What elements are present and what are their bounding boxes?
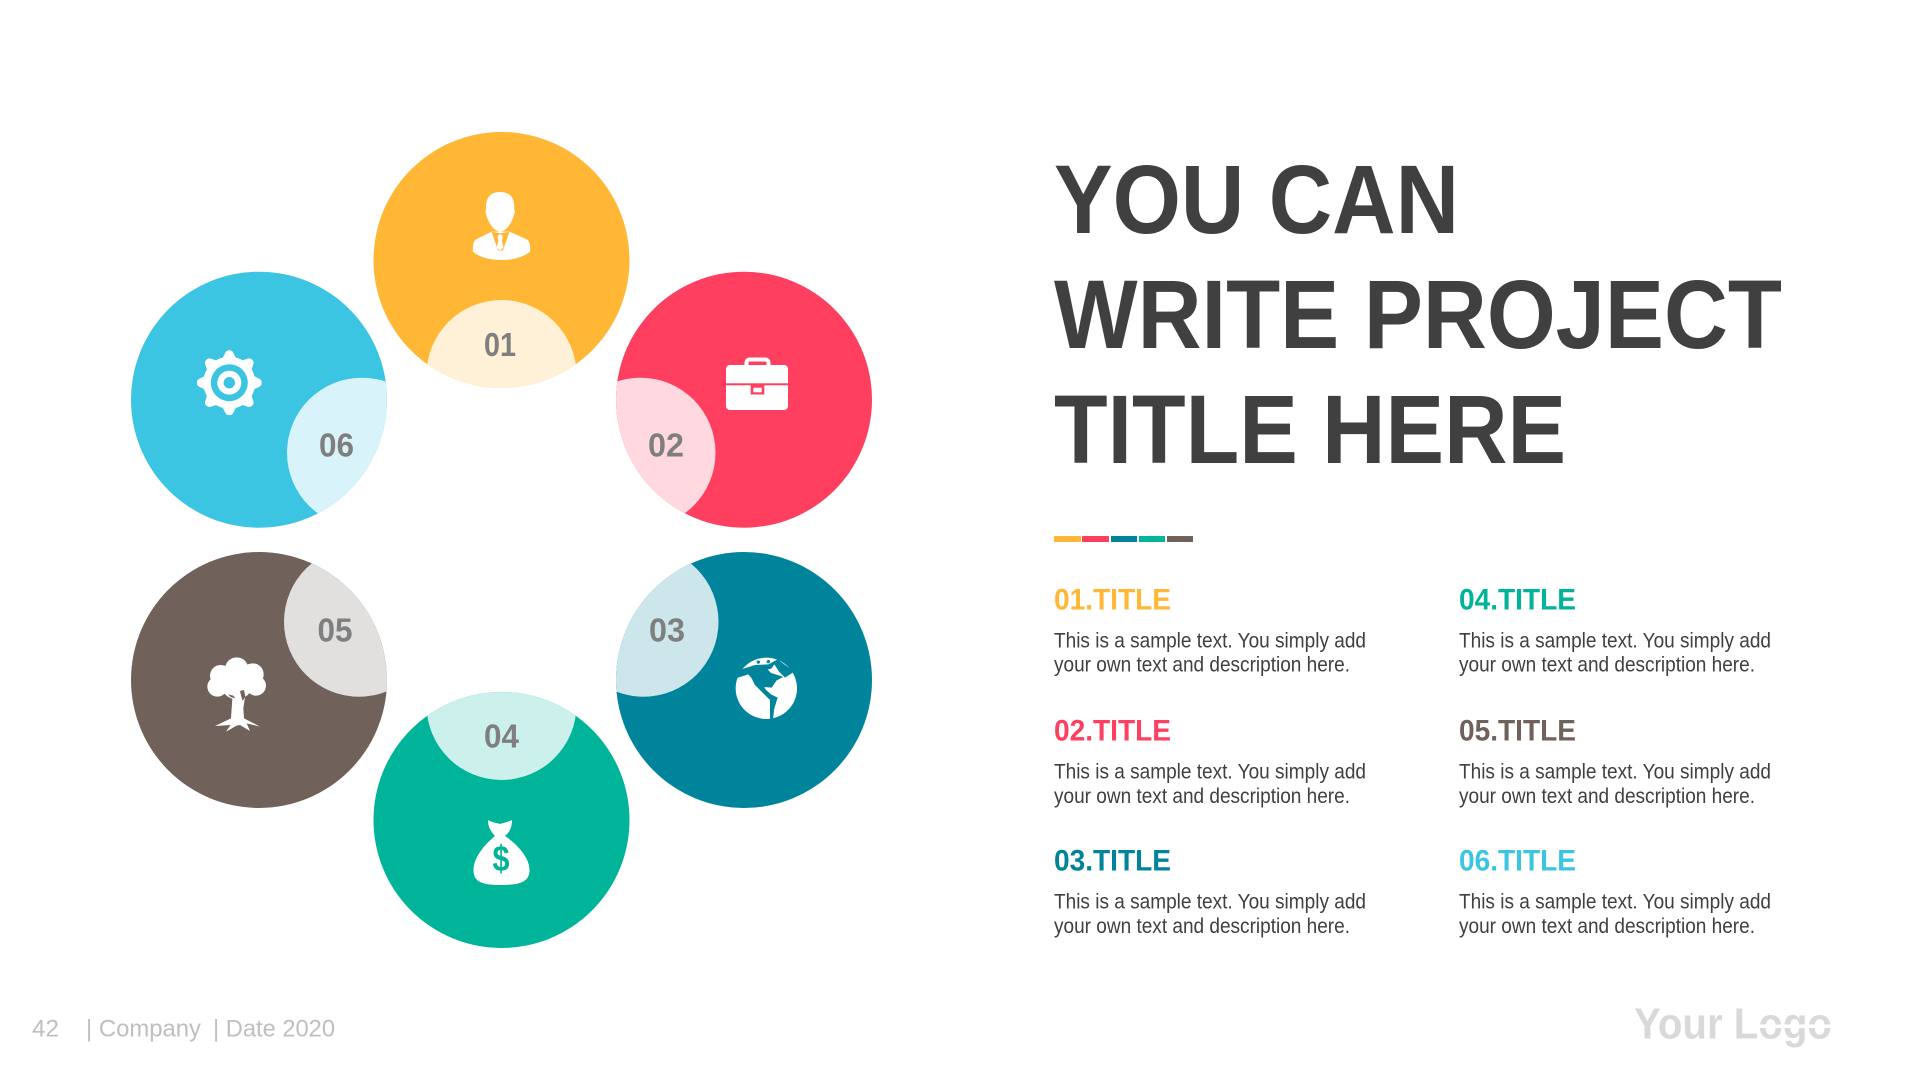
number 05: 05 xyxy=(318,612,352,649)
circle diagram xyxy=(131,132,872,948)
title: YOU CAN xyxy=(1054,145,1459,254)
number 06: 06 xyxy=(319,427,354,464)
panel: circle 05 brown xyxy=(131,552,387,808)
icon: briefcase xyxy=(726,360,788,410)
text block 02: 02.TITLE xyxy=(1054,714,1171,747)
number 03: 03 xyxy=(649,612,685,649)
text block 01: 01.TITLE xyxy=(1054,583,1171,616)
panel: circle 04 green xyxy=(374,692,630,948)
number 02: 02 xyxy=(648,427,684,464)
text block 02: your own text and description here. xyxy=(1054,784,1350,808)
text block 02: This is a sample text. You simply add xyxy=(1054,760,1366,784)
footer: 42 xyxy=(32,1016,59,1043)
text block 02 xyxy=(1054,714,1366,808)
text block 06: your own text and description here. xyxy=(1459,914,1755,938)
footer: | Date 2020 xyxy=(213,1016,335,1043)
footer xyxy=(32,1016,335,1043)
text block 05: This is a sample text. You simply add xyxy=(1459,760,1771,784)
footer: | Company xyxy=(86,1016,201,1043)
text block 03 xyxy=(1054,844,1366,938)
text block 05: your own text and description here. xyxy=(1459,784,1755,808)
number 04: 04 xyxy=(484,718,520,755)
logo: Your Logo xyxy=(1634,1000,1832,1048)
text block 05: 05.TITLE xyxy=(1459,714,1576,747)
text block 04: 04.TITLE xyxy=(1459,583,1576,616)
panel: circle 02 red xyxy=(616,272,872,528)
text block 04: your own text and description here. xyxy=(1459,653,1755,677)
panel: circle 06 blue xyxy=(131,272,387,528)
text block 04 xyxy=(1459,583,1771,677)
text block 06: 06.TITLE xyxy=(1459,844,1576,877)
text block 05 xyxy=(1459,714,1771,808)
text block 04: This is a sample text. You simply add xyxy=(1459,629,1771,653)
icon: money bag: $ xyxy=(492,838,510,879)
title: WRITE PROJECT xyxy=(1054,260,1782,369)
panel: circle 01 yellow xyxy=(374,132,630,388)
text block 01: your own text and description here. xyxy=(1054,653,1350,677)
text block 06 xyxy=(1459,844,1771,938)
number 01: 01 xyxy=(484,326,516,363)
icon: money bag xyxy=(474,820,530,885)
icon: businessman xyxy=(473,192,530,260)
title: TITLE HERE xyxy=(1054,375,1566,484)
text block 03: your own text and description here. xyxy=(1054,914,1350,938)
panel: circle 03 teal xyxy=(616,552,872,808)
colour bar xyxy=(1054,536,1193,542)
icon: globe xyxy=(736,658,797,720)
icon: gear xyxy=(197,350,262,415)
text block 06: This is a sample text. You simply add xyxy=(1459,890,1771,914)
text block 03: This is a sample text. You simply add xyxy=(1054,890,1366,914)
title xyxy=(1054,145,1782,484)
text block 03: 03.TITLE xyxy=(1054,844,1171,877)
text block 01 xyxy=(1054,583,1366,677)
icon: tree xyxy=(207,657,266,732)
text block 01: This is a sample text. You simply add xyxy=(1054,629,1366,653)
